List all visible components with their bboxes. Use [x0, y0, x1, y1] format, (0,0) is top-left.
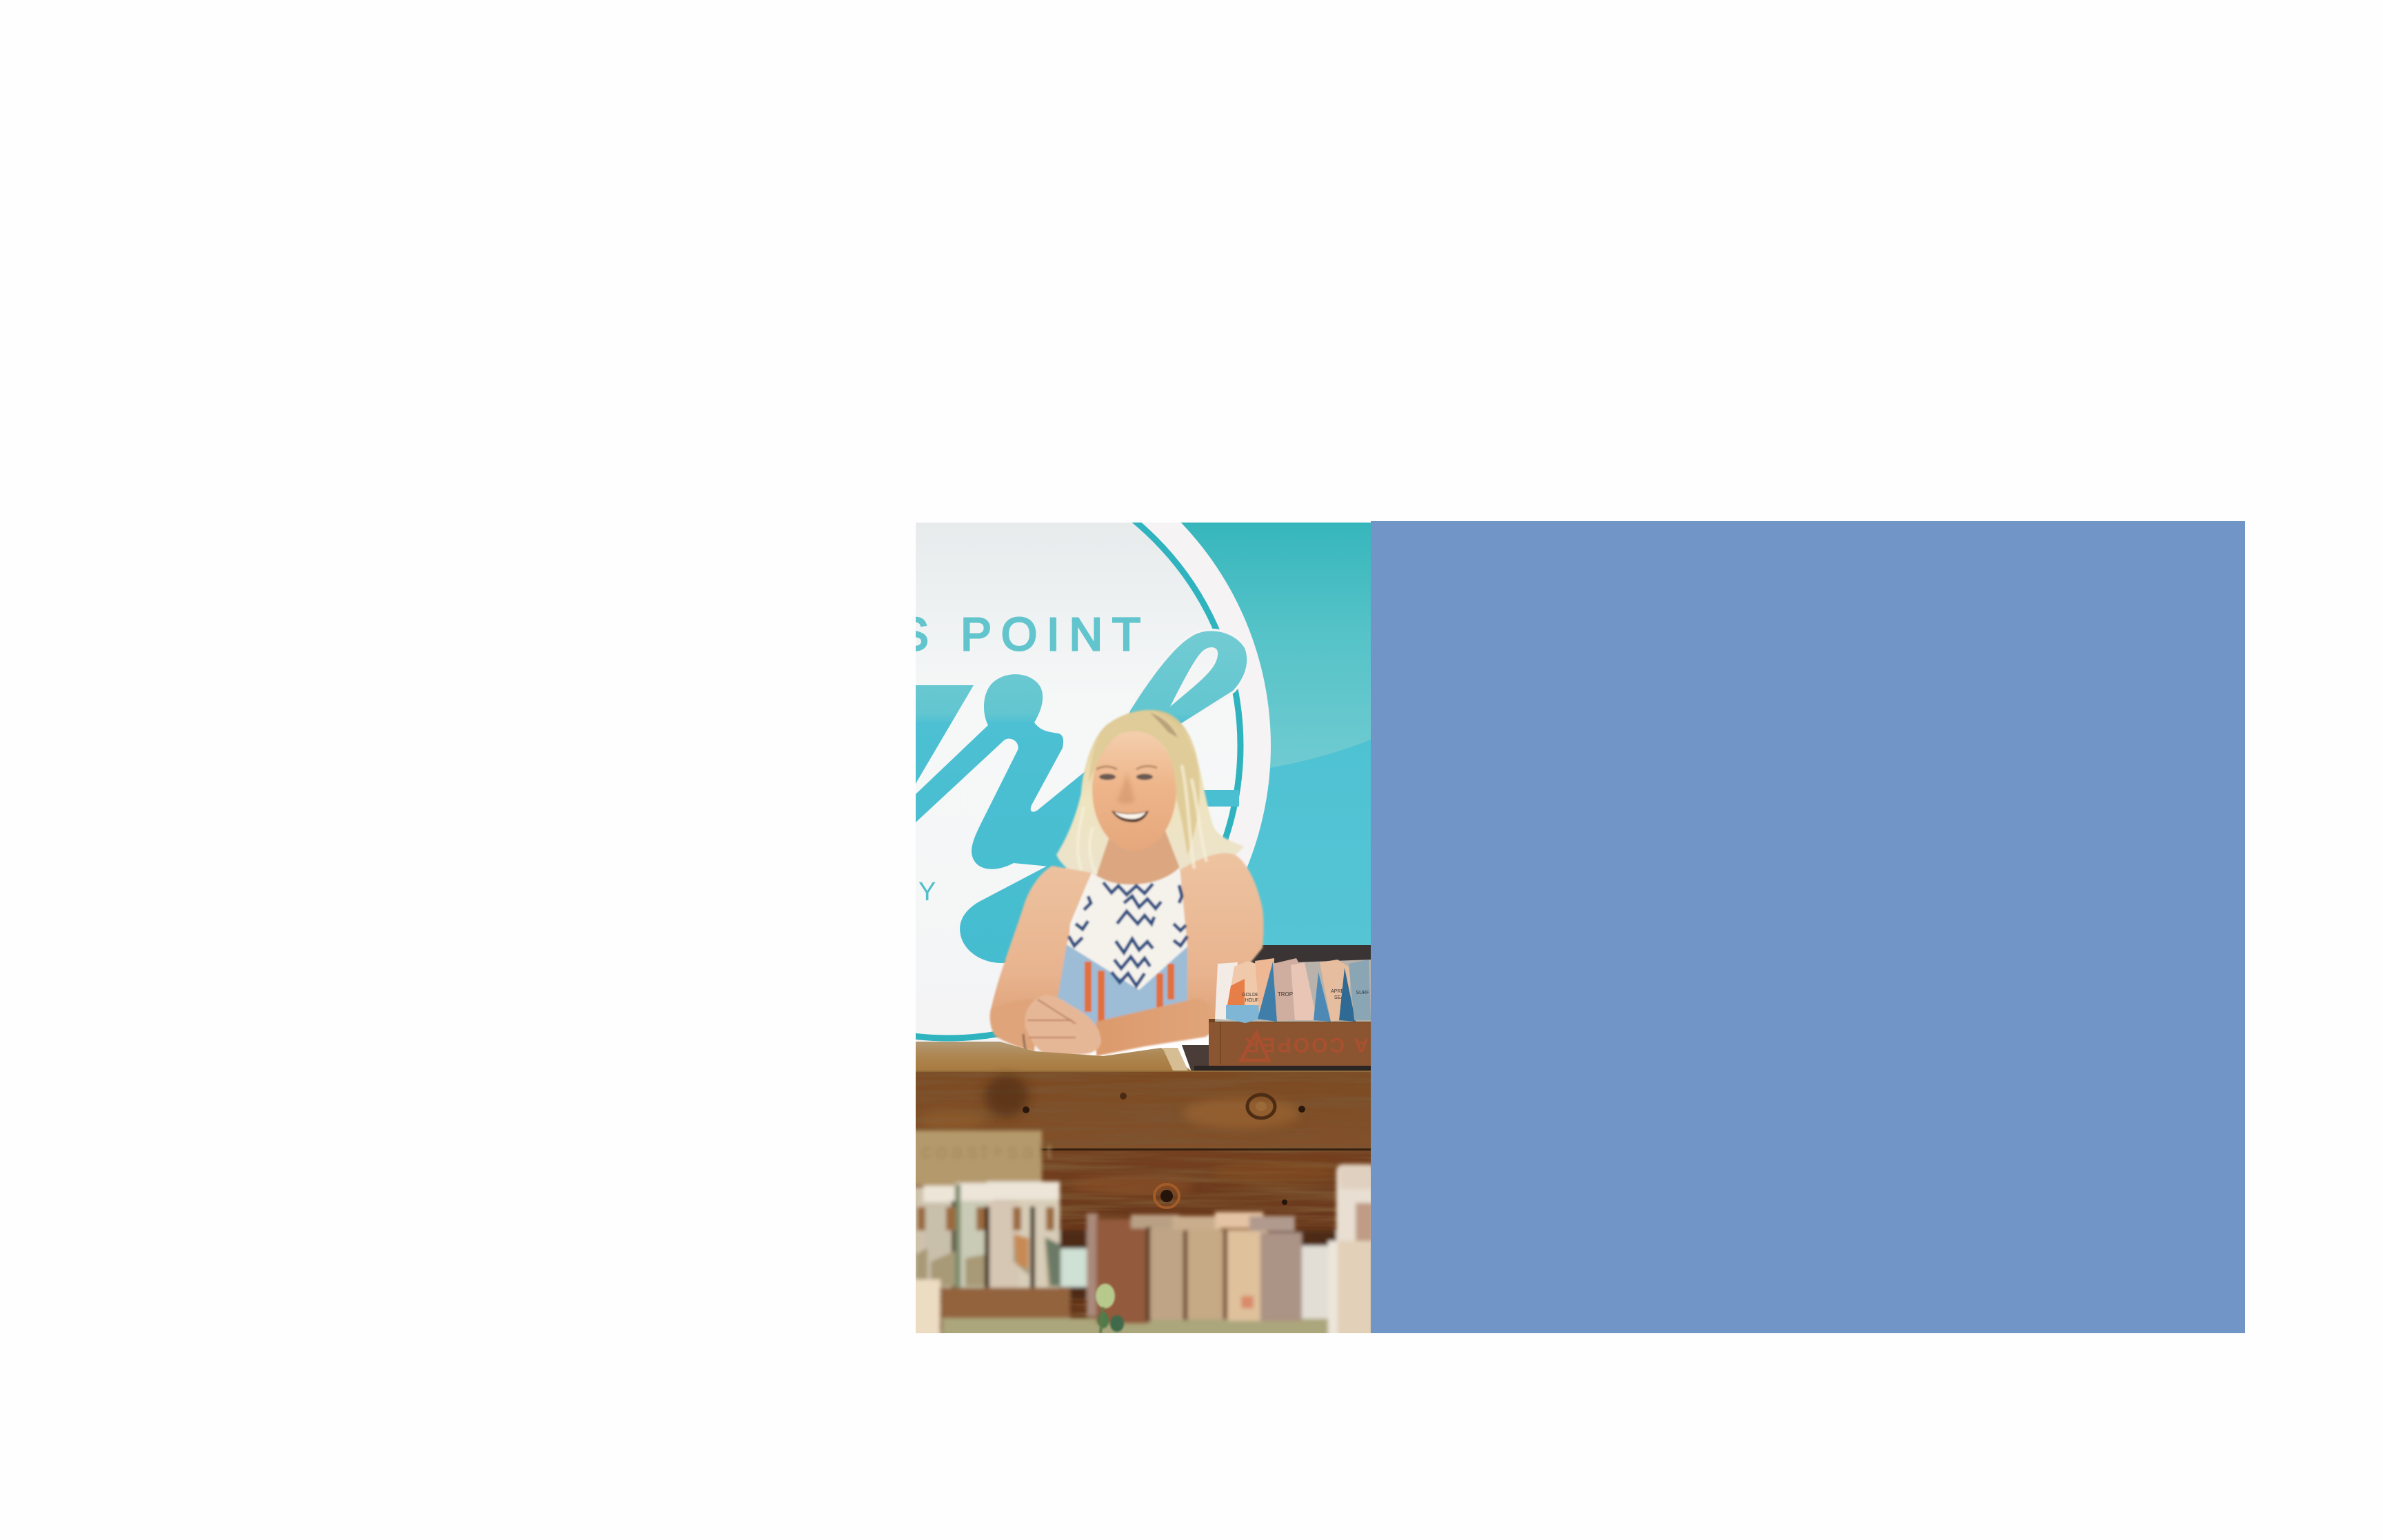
- crate lettering: A COOPER: [1243, 1033, 1369, 1056]
- lower shelf shadow: [1048, 1230, 1351, 1299]
- teal wall: [1180, 523, 1371, 945]
- clasped hands: [1025, 995, 1101, 1056]
- package: Surf: SURF: [1356, 991, 1369, 995]
- laptop lid: [1249, 945, 1371, 964]
- lit box tops: [923, 1182, 1060, 1202]
- eyes and brows: [1096, 766, 1157, 780]
- counter top: [916, 1042, 1193, 1072]
- box art: [916, 1234, 1060, 1286]
- package: white: [1215, 962, 1238, 1020]
- smile: [1112, 811, 1149, 822]
- box labels: [917, 1207, 1054, 1230]
- package: Surf: [1339, 960, 1371, 1022]
- small plant: [1096, 1284, 1124, 1333]
- mint box: [1060, 1248, 1089, 1287]
- blurred foreground products: [912, 1131, 1375, 1339]
- bottle and carton: [1328, 1164, 1375, 1337]
- panel: solid blue block: [1371, 521, 2245, 1333]
- package: peach: [1255, 958, 1274, 1013]
- package: Golden Hour: [1226, 961, 1263, 1023]
- counter front wood planks: [916, 1071, 1371, 1333]
- photo: shop owner behind counter: [916, 523, 1371, 1333]
- wood light and dark patches: [917, 1075, 1338, 1194]
- forearm: [1096, 999, 1218, 1056]
- package: floral: [1291, 962, 1317, 1020]
- left forearm: [990, 1000, 1038, 1052]
- brown and taupe boxes: [1087, 1212, 1302, 1324]
- neck: [1096, 831, 1180, 886]
- wood knots: [1023, 1093, 1305, 1208]
- package: Tropic: [1258, 958, 1302, 1022]
- cream box row: [912, 1182, 1060, 1288]
- arms and shoulders: [990, 853, 1263, 1048]
- hair back: [1056, 710, 1244, 881]
- crate logo: [1241, 1033, 1269, 1060]
- wooden crate: [1209, 1019, 1371, 1066]
- bracelet: [1023, 1034, 1029, 1058]
- hair fringe: [1089, 710, 1200, 855]
- sign lettering: POINT: S POINT: [898, 609, 1150, 660]
- dress: navy chevrons: [1069, 882, 1187, 986]
- package: Tropic: TROPIC: [1278, 991, 1298, 997]
- package: Golden Hour: HOUR: [1245, 998, 1259, 1003]
- sign lettering: Y: Y: [918, 878, 936, 906]
- hair parting shadow: [1150, 713, 1178, 738]
- person: [990, 710, 1263, 1058]
- packages backdrop: [1215, 960, 1371, 1022]
- hair strands: [1078, 765, 1207, 874]
- round logo sign: [916, 523, 1271, 1052]
- package: Apres Sea: [1314, 960, 1350, 1022]
- kraft display sign: [912, 1131, 1056, 1186]
- dress: orange stripes: [1088, 962, 1171, 1027]
- pale rear box: [1295, 1246, 1328, 1319]
- package: Apres Sea: APRÈS: [1331, 988, 1347, 994]
- dress: white halter: [1067, 867, 1187, 990]
- wooden tray: [942, 1288, 1070, 1318]
- olive shelf edge: [942, 1318, 1349, 1339]
- pale tag: [912, 1279, 941, 1337]
- dress: denim lower panel: [1056, 944, 1189, 1026]
- tea bag packages: [1215, 958, 1371, 1023]
- face: [1092, 729, 1176, 851]
- page canvas: [916, 521, 2245, 1333]
- package: Golden Hour: GOLDEN: [1242, 993, 1263, 997]
- nose shadow: [1118, 776, 1134, 804]
- kraft display sign: coast+salt: [921, 1140, 1056, 1163]
- plank seam: [916, 1148, 1371, 1151]
- package: Apres Sea: SEA: [1334, 995, 1344, 1000]
- tray and cables: [1163, 1045, 1371, 1072]
- script logo strokes: [916, 631, 1247, 963]
